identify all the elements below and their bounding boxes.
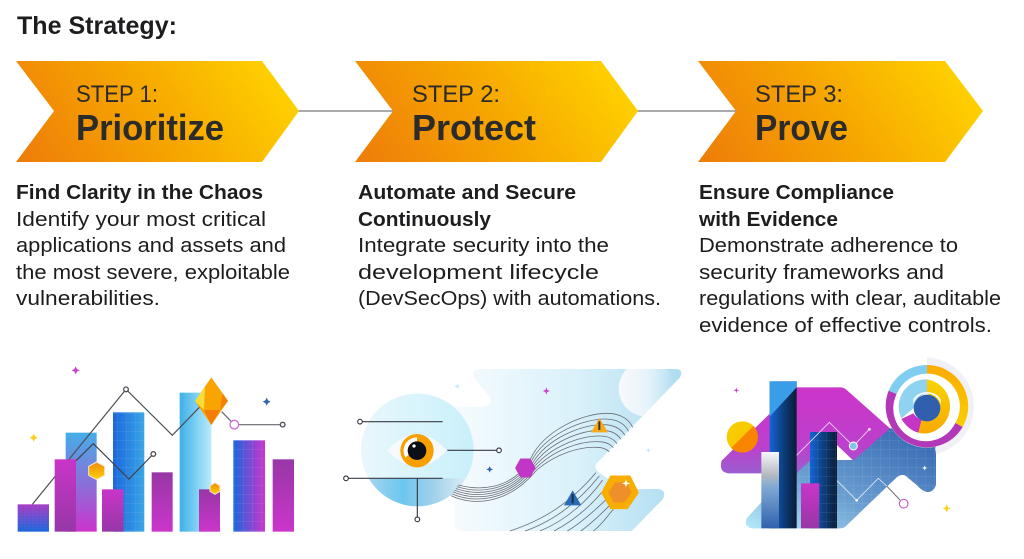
step 3 chevron: STEP 3: (755, 81, 843, 108)
donut chart (886, 357, 974, 454)
icon: sparkles (454, 383, 651, 473)
line chart: lower (837, 478, 908, 508)
text block: step 3 (698, 182, 1001, 337)
eye circle (361, 394, 474, 506)
step 3 chevron: Prove (755, 107, 848, 148)
eye lines and nodes (344, 419, 501, 522)
icon: sparkles (30, 366, 271, 442)
text block: step 2: Integrate security into the (358, 235, 609, 257)
text block: step 2: (DevSecOps) with automations. (358, 288, 661, 310)
icon: eye (387, 434, 447, 467)
icon: large gem (195, 377, 228, 425)
step 1 chevron: Prioritize (76, 107, 224, 148)
illustration: bar chart with gems (18, 366, 294, 532)
text block: step 1: applications and assets and (16, 235, 286, 257)
icon: yellow warning triangle (591, 418, 608, 432)
text block: step 3: Ensure Compliance (699, 182, 894, 204)
orange circle (727, 421, 758, 453)
text block: step 3: evidence of effective controls. (699, 315, 992, 337)
step 2 chevron: STEP 2: (412, 81, 500, 108)
icon: blue warning triangle (564, 490, 581, 505)
text block: step 1: the most severe, exploitable (16, 262, 290, 284)
illustration: compliance charts with donut (721, 357, 974, 528)
magenta shape (721, 387, 890, 473)
data stream lines (451, 413, 633, 531)
background shape (454, 369, 681, 531)
connector line: step 2 to step 3 (637, 110, 737, 112)
tall navy bar (770, 381, 797, 528)
icon: orange hexagon (89, 462, 105, 480)
icon: magenta hexagon (516, 459, 535, 477)
title: The Strategy: (17, 12, 177, 40)
icon: sparkles (733, 387, 951, 512)
text block: step 1 (16, 182, 290, 310)
text block: step 3: security frameworks and (699, 262, 944, 284)
text block: step 3: Demonstrate adherence to (699, 235, 958, 257)
text block: step 1: vulnerabilities. (16, 288, 160, 310)
step 2 chevron (355, 61, 638, 162)
line chart: upper (797, 422, 870, 455)
text block: step 2: Automate and Secure (358, 182, 576, 204)
gray gradient bar (761, 452, 779, 528)
step 1 chevron (16, 61, 299, 162)
grid bar (810, 432, 837, 528)
icon: orange gem (602, 476, 638, 509)
text block: step 2: development lifecycle (358, 262, 599, 284)
step 2 chevron: Protect (412, 107, 536, 148)
step 1 chevron: STEP 1: (76, 81, 158, 108)
step 3 chevron (698, 61, 983, 162)
text block: step 3: regulations with clear, auditable (699, 288, 1001, 310)
illustration: eye with data streams (344, 361, 681, 531)
text block: step 2: Continuously (358, 209, 492, 231)
text block: step 3: with Evidence (698, 209, 838, 231)
text block: step 1: Identify your most critical (16, 209, 266, 231)
icon: small orange hexagon (210, 483, 220, 494)
magenta bar (801, 483, 819, 528)
text block: step 2 (358, 182, 661, 310)
connector line: step 1 to step 2 (298, 110, 394, 112)
blue shape (746, 428, 936, 528)
pale circle in background corner (618, 369, 670, 416)
text block: step 1: Find Clarity in the Chaos (16, 182, 263, 204)
